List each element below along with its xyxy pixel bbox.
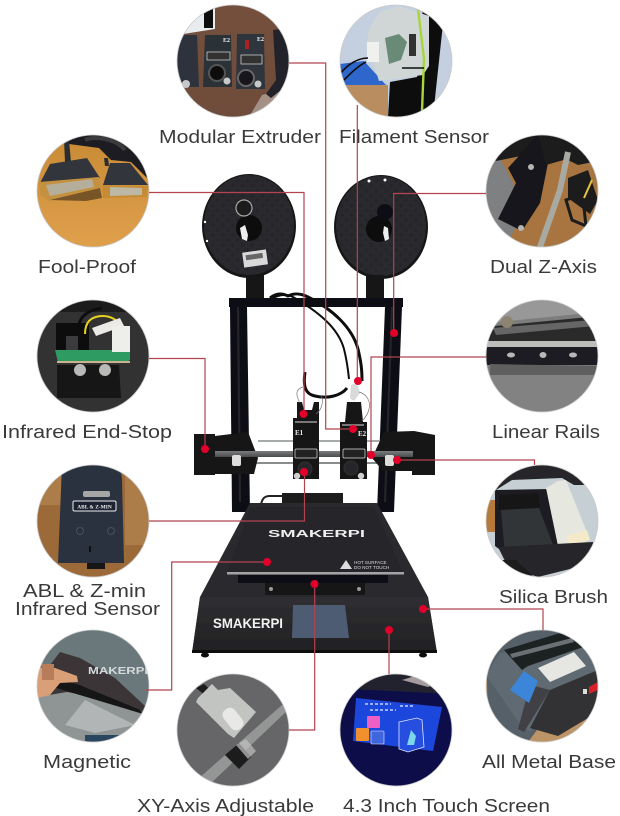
callout: filament sensor <box>354 105 362 385</box>
label: Silica Brush: Silica Brush <box>499 587 608 607</box>
photo: infrared end-stop <box>37 300 149 412</box>
photo: XY-axis adjustable <box>177 674 290 786</box>
left filament spool <box>202 174 296 278</box>
label: All Metal Base: All Metal Base <box>482 752 616 772</box>
callout: touch screen <box>385 626 393 674</box>
label: 4.3 Inch Touch Screen: 4.3 Inch Touch Screen <box>343 796 550 816</box>
right filament spool <box>334 175 428 279</box>
label: Infrared End-Stop: Infrared End-Stop <box>2 422 172 442</box>
label: XY-Axis Adjustable: XY-Axis Adjustable <box>137 796 314 816</box>
photo: magnetic build plate: MAKERPI <box>88 666 148 677</box>
callout: dual Z-axis <box>390 194 486 337</box>
label: Filament Sensor: Filament Sensor <box>339 127 489 147</box>
extruder E1 <box>293 402 319 479</box>
extruder E2 <box>297 383 370 479</box>
3D printer <box>192 174 437 658</box>
filament tube cables <box>270 294 362 397</box>
photo: modular extruder: E2 <box>223 38 230 44</box>
callout: magnetic <box>146 558 271 690</box>
X-axis rods and rail <box>194 431 435 475</box>
spool holder stems <box>246 275 384 299</box>
callout: fool-proof <box>149 192 308 418</box>
extruder E1: E1 <box>295 429 304 437</box>
photo: modular extruder: E2 <box>257 37 264 43</box>
label: Fool-Proof: Fool-Proof <box>38 257 137 277</box>
printer base <box>192 493 437 658</box>
callout: ABL and Z-min sensor <box>149 468 308 521</box>
label: ABL and Z-min Infrared Sensor <box>15 581 160 619</box>
callout: XY-axis adjustable <box>289 580 318 730</box>
label: ABL and Z-min Infrared Sensor: ABL & Z-min <box>23 581 146 601</box>
label: Linear Rails: Linear Rails <box>492 422 600 442</box>
photo: silica brush <box>486 465 598 577</box>
printer base: SMAKERPI <box>268 529 365 540</box>
label: Modular Extruder: Modular Extruder <box>159 127 321 147</box>
callout: modular extruder <box>289 63 357 433</box>
photo: linear rails <box>486 300 598 412</box>
label: ABL and Z-min Infrared Sensor: Infrared Sensor <box>15 599 160 619</box>
photo: filament sensor <box>340 5 452 117</box>
photo: dual Z-axis <box>486 135 598 247</box>
photo: fool-proof connectors <box>37 135 149 247</box>
callout: linear rails <box>367 357 486 459</box>
photo: modular extruder <box>177 5 291 117</box>
printer base: SMAKERPI <box>213 615 283 631</box>
label: Magnetic: Magnetic <box>43 752 131 772</box>
photo: magnetic build plate <box>37 630 149 742</box>
extruder E2: E2 <box>358 430 367 438</box>
printer base: DO NOT TOUCH <box>354 565 389 570</box>
callout: infrared end-stop <box>149 358 209 453</box>
photo: ABL and Z-min infrared sensor <box>37 465 149 577</box>
photo: ABL and Z-min infrared sensor: ABL & Z-MIN <box>77 504 112 510</box>
photo: touch screen <box>340 674 452 786</box>
photo: all-metal base <box>486 630 598 742</box>
printer base: HOT SURFACE <box>354 560 387 565</box>
callout: all-metal base <box>419 605 543 630</box>
frame: top bar and columns <box>229 298 403 512</box>
callout: silica brush <box>393 456 534 465</box>
label: Dual Z-Axis: Dual Z-Axis <box>490 257 597 277</box>
